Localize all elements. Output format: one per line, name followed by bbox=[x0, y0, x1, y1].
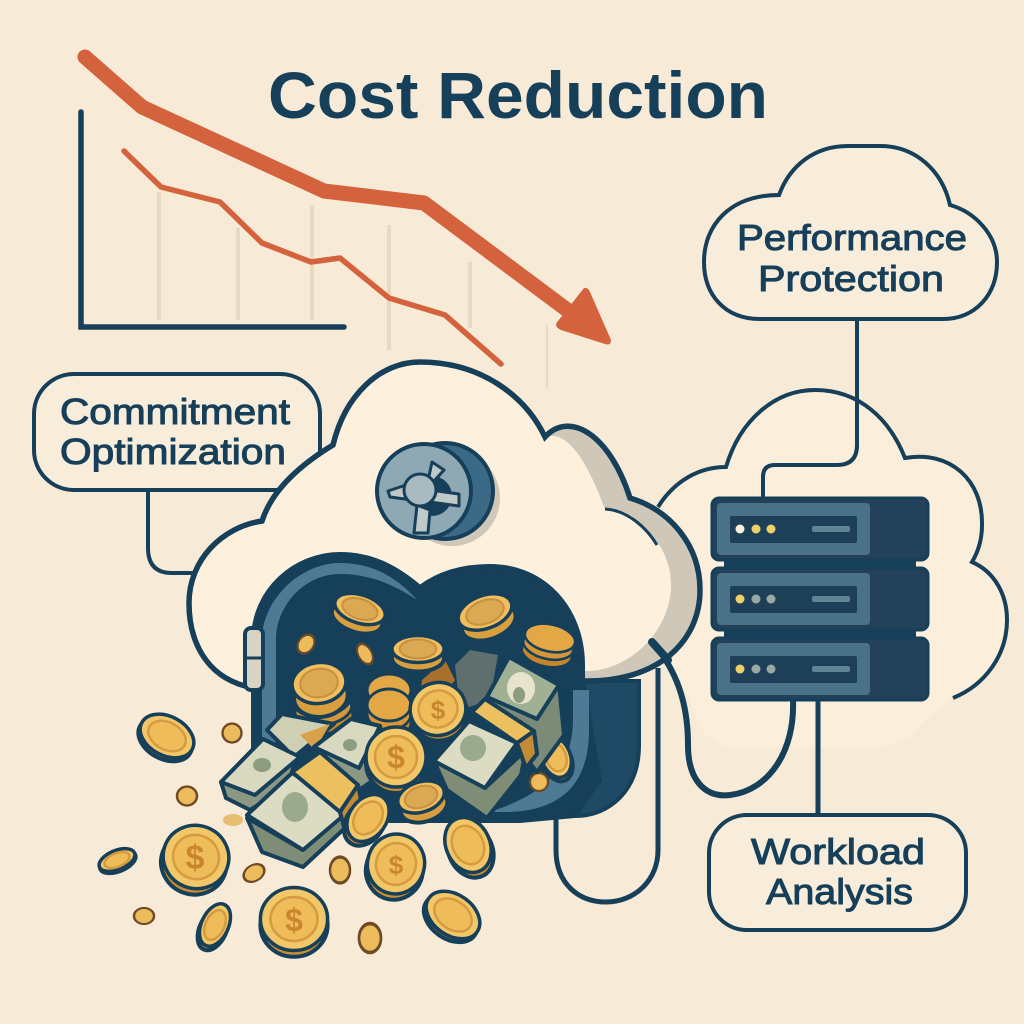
spilled coins: $ bbox=[389, 850, 404, 880]
spilled coins: $ bbox=[285, 902, 303, 938]
dollar coins inside vault: $ bbox=[431, 695, 446, 725]
label: Workload Analysis: Analysis bbox=[766, 871, 913, 912]
server unit 2 bbox=[712, 568, 928, 630]
main cloud bbox=[189, 362, 700, 686]
vault door bbox=[245, 554, 600, 821]
server cloud bbox=[658, 390, 1007, 748]
server unit 3 bbox=[712, 638, 928, 700]
cash stacks bbox=[221, 657, 564, 867]
title: Cost Reduction bbox=[268, 58, 768, 132]
chart axes bbox=[81, 112, 344, 327]
cash stack: upper right bbox=[487, 657, 564, 772]
label: Commitment Optimization: Optimization bbox=[60, 431, 286, 472]
dollar coins inside vault: $ bbox=[387, 739, 405, 775]
label: Workload Analysis bbox=[709, 815, 966, 930]
coins inside vault bbox=[289, 587, 578, 791]
cables bbox=[556, 645, 793, 902]
vault wheel bbox=[377, 443, 500, 546]
cash stack: left bbox=[221, 739, 300, 810]
server unit 1 bbox=[712, 498, 928, 560]
cash stack: upper middle bbox=[314, 719, 388, 790]
label cloud: Performance Protection bbox=[704, 146, 997, 319]
label cloud: Performance Protection: Protection bbox=[758, 258, 944, 299]
server rack bbox=[712, 498, 928, 700]
cash stack: front with gold band bbox=[247, 752, 362, 867]
cash stack: upper left bbox=[267, 714, 334, 757]
chart: falling cost lines bbox=[81, 57, 611, 388]
vault hinge bbox=[245, 628, 263, 690]
connector: server to workload bbox=[816, 700, 820, 815]
label: Commitment Optimization: Commitment bbox=[60, 391, 290, 432]
vault rear panel bbox=[520, 681, 639, 816]
label cloud: Performance Protection: Performance bbox=[737, 217, 967, 258]
dollar coins inside vault bbox=[335, 676, 473, 854]
thin red cost line bbox=[124, 151, 501, 364]
spilled coins bbox=[96, 705, 502, 957]
label: Workload Analysis: Workload bbox=[751, 831, 925, 872]
thick red arrow bbox=[85, 57, 611, 344]
label: Commitment Optimization bbox=[34, 374, 320, 573]
spilled coins: $ bbox=[186, 839, 205, 877]
cash stack: right with gold band bbox=[434, 699, 537, 818]
connector: performance to server bbox=[763, 320, 857, 500]
